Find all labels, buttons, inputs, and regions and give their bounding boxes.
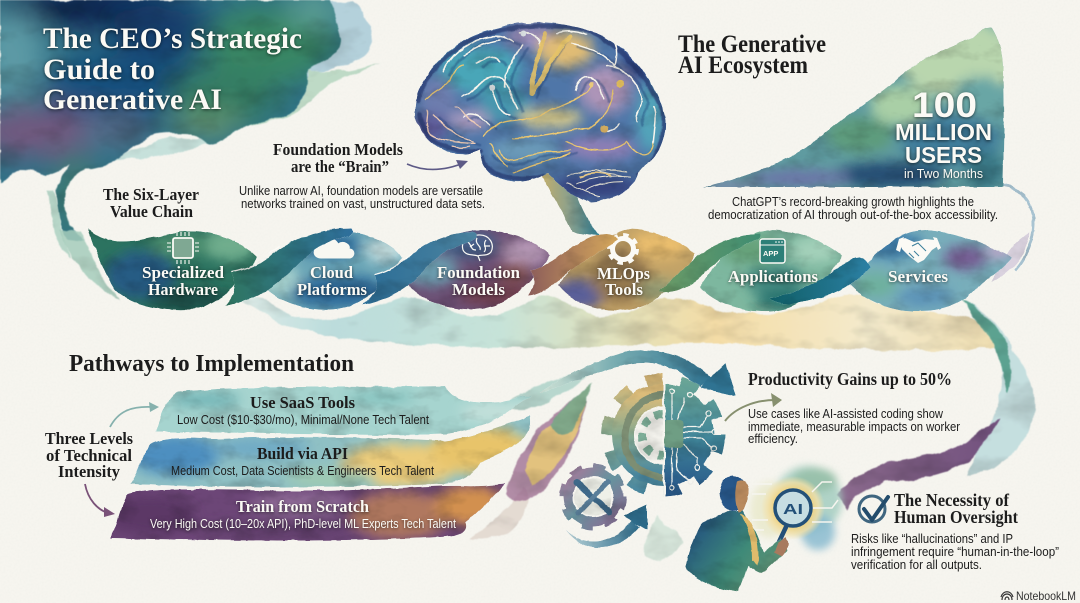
- value chain: six layers: [60, 228, 1012, 312]
- pathway: build via API: [130, 416, 530, 488]
- icon: app window: [760, 239, 785, 263]
- brain folds drawn in crop coordinates: [418, 26, 664, 197]
- icon: gear: [609, 235, 637, 263]
- flowing ribbons from pathway bars to gears: [470, 365, 600, 540]
- layer 2: cloud platforms: Platforms: [297, 280, 367, 299]
- heading: necessity of human oversight: Human Oversight: [894, 507, 1018, 527]
- illustration: AI magnifier with circuit wash: [750, 466, 842, 550]
- layer 1: specialized hardware: [60, 228, 257, 310]
- text: oversight note: verification for all outputs.: [851, 557, 982, 572]
- label: three levels of technical intensity: Three Levels: [45, 429, 134, 448]
- pathway: build via API: Build via API: [257, 444, 348, 463]
- text: oversight note: infringement require “human-in-the-loop”: [851, 544, 1059, 559]
- connector: ribbon from growth chart to services: [992, 185, 1033, 282]
- heading: six-layer value chain: Value Chain: [110, 202, 193, 221]
- text: oversight note: Risks like “hallucinations” and IP: [851, 531, 1013, 546]
- icon: check mark in circle: [859, 496, 888, 522]
- layer 3: foundation models: Foundation: [437, 263, 521, 282]
- arrow: big curved arrow over gears: [540, 350, 736, 397]
- illustration: AI magnifier with circuit wash: AI: [783, 501, 803, 518]
- layer 6: services: Services: [888, 267, 948, 286]
- arrow: down to train from scratch: [85, 484, 115, 517]
- layer 1: specialized hardware: Hardware: [148, 280, 218, 299]
- arrow: productivity note: [725, 393, 782, 421]
- chart: user growth mountain: USERS: [905, 142, 982, 168]
- label: three levels of technical intensity: [45, 429, 134, 481]
- text: productivity note: immediate, measurable impacts on worker: [748, 419, 961, 434]
- layer 1: specialized hardware: Specialized: [142, 263, 225, 282]
- layer 6: services: [850, 230, 1012, 312]
- pathway: train from scratch: Train from Scratch: [236, 497, 370, 516]
- chart: user growth mountain: MILLION: [895, 119, 992, 145]
- icon: brain outline: [462, 235, 492, 261]
- heading: six-layer value chain: [103, 185, 199, 221]
- heading: the generative AI ecosystem: [678, 31, 826, 79]
- text: productivity note: Use cases like AI-assisted coding show: [748, 406, 944, 421]
- arrow: small arrow into big gear: [566, 505, 647, 548]
- label: three levels of technical intensity: of Technical: [46, 446, 132, 465]
- layer 4: MLOps tools: [558, 228, 694, 312]
- text: ChatGPT growth note: [708, 194, 998, 222]
- text: ChatGPT growth note: ChatGPT’s record-breaking growth highlights the: [732, 194, 974, 209]
- layer 2: cloud platforms: Cloud: [310, 263, 354, 282]
- pathway: use SaaS tools: [156, 386, 532, 436]
- chart: user growth mountain: 100: [912, 86, 977, 125]
- heading: necessity of human oversight: The Necessity of: [894, 490, 1009, 510]
- layer 4: MLOps tools: Tools: [605, 280, 643, 299]
- label: three levels of technical intensity: Intensity: [58, 462, 121, 481]
- icon: large half-gear half-circuit: [607, 379, 719, 491]
- layer 2: cloud platforms: [268, 232, 402, 310]
- layer 5: applications: Applications: [728, 267, 818, 286]
- layer 4: MLOps tools: MLOps: [597, 264, 650, 283]
- pathway: build via API: Medium Cost, Data Scientists & Engineers Tech Talent: [171, 463, 434, 478]
- heading: foundation models callout: Foundation Models: [273, 140, 404, 159]
- layer 5: applications: [700, 230, 842, 312]
- text: productivity note: [748, 406, 961, 446]
- arrow: foundation models to brain: [407, 160, 468, 169]
- heading: foundation models callout: are the “Brain”: [291, 157, 389, 176]
- text: ChatGPT growth note: democratization of AI through out-of-the-box accessibility.: [708, 207, 998, 222]
- heading: the generative AI ecosystem: The Generative: [678, 31, 826, 58]
- heading: necessity of human oversight: [894, 490, 1018, 527]
- icon: microchip: [167, 232, 199, 264]
- heading: productivity gains: Productivity Gains up to 50%: [748, 369, 952, 389]
- pathway: train from scratch: Very High Cost (10–20x API), PhD-level ML Experts Tech Talent: [150, 516, 456, 531]
- twisted ribbon crossings between layers: [225, 228, 870, 306]
- brain stem: [539, 172, 600, 236]
- pathway: use SaaS tools: Use SaaS Tools: [250, 393, 356, 412]
- pathway: use SaaS tools: Low Cost ($10-$30/mo), Minimal/None Tech Talent: [177, 412, 429, 427]
- text: oversight note: [851, 531, 1059, 572]
- heading: foundation models callout: [239, 140, 485, 211]
- icon: small gear with wrench and screwdriver: [564, 468, 622, 526]
- ribbon: pale band under the value chain: [240, 293, 1005, 351]
- illustration: person silhouette: [686, 476, 790, 592]
- background wash: top-left watercolor cloud: [0, 0, 400, 258]
- heading: pathways to implementation: Pathways to Implementation: [69, 351, 354, 377]
- icon: handshake: [896, 237, 941, 263]
- illustration: watercolor brain: [414, 22, 666, 202]
- heading: foundation models callout: networks trained on vast, unstructured data sets.: [241, 196, 485, 211]
- chart: user growth mountain: in Two Months: [904, 166, 983, 181]
- layer 3: foundation models: Models: [452, 280, 505, 299]
- illustration: pale wash beside person: [644, 515, 683, 558]
- arrow: up to SaaS tools: [110, 402, 159, 427]
- icon: app window: APP: [763, 249, 778, 258]
- title: [43, 22, 302, 116]
- heading: the generative AI ecosystem: AI Ecosystem: [678, 52, 808, 79]
- title: The CEO’s Strategic: [43, 22, 302, 55]
- chart: user growth mountain: [703, 28, 1005, 188]
- layer 3: foundation models: [408, 230, 550, 310]
- heading: six-layer value chain: The Six-Layer: [103, 185, 199, 204]
- title: Guide to: [43, 53, 155, 86]
- connector: ribbon from services down to oversight: [836, 298, 1034, 510]
- text: productivity note: efficiency.: [748, 431, 798, 446]
- heading: foundation models callout: Unlike narrow AI, foundation models are versatile: [239, 183, 483, 198]
- icon: cloud: [314, 239, 354, 258]
- title: Generative AI: [43, 83, 222, 116]
- pathway: train from scratch: [110, 483, 505, 541]
